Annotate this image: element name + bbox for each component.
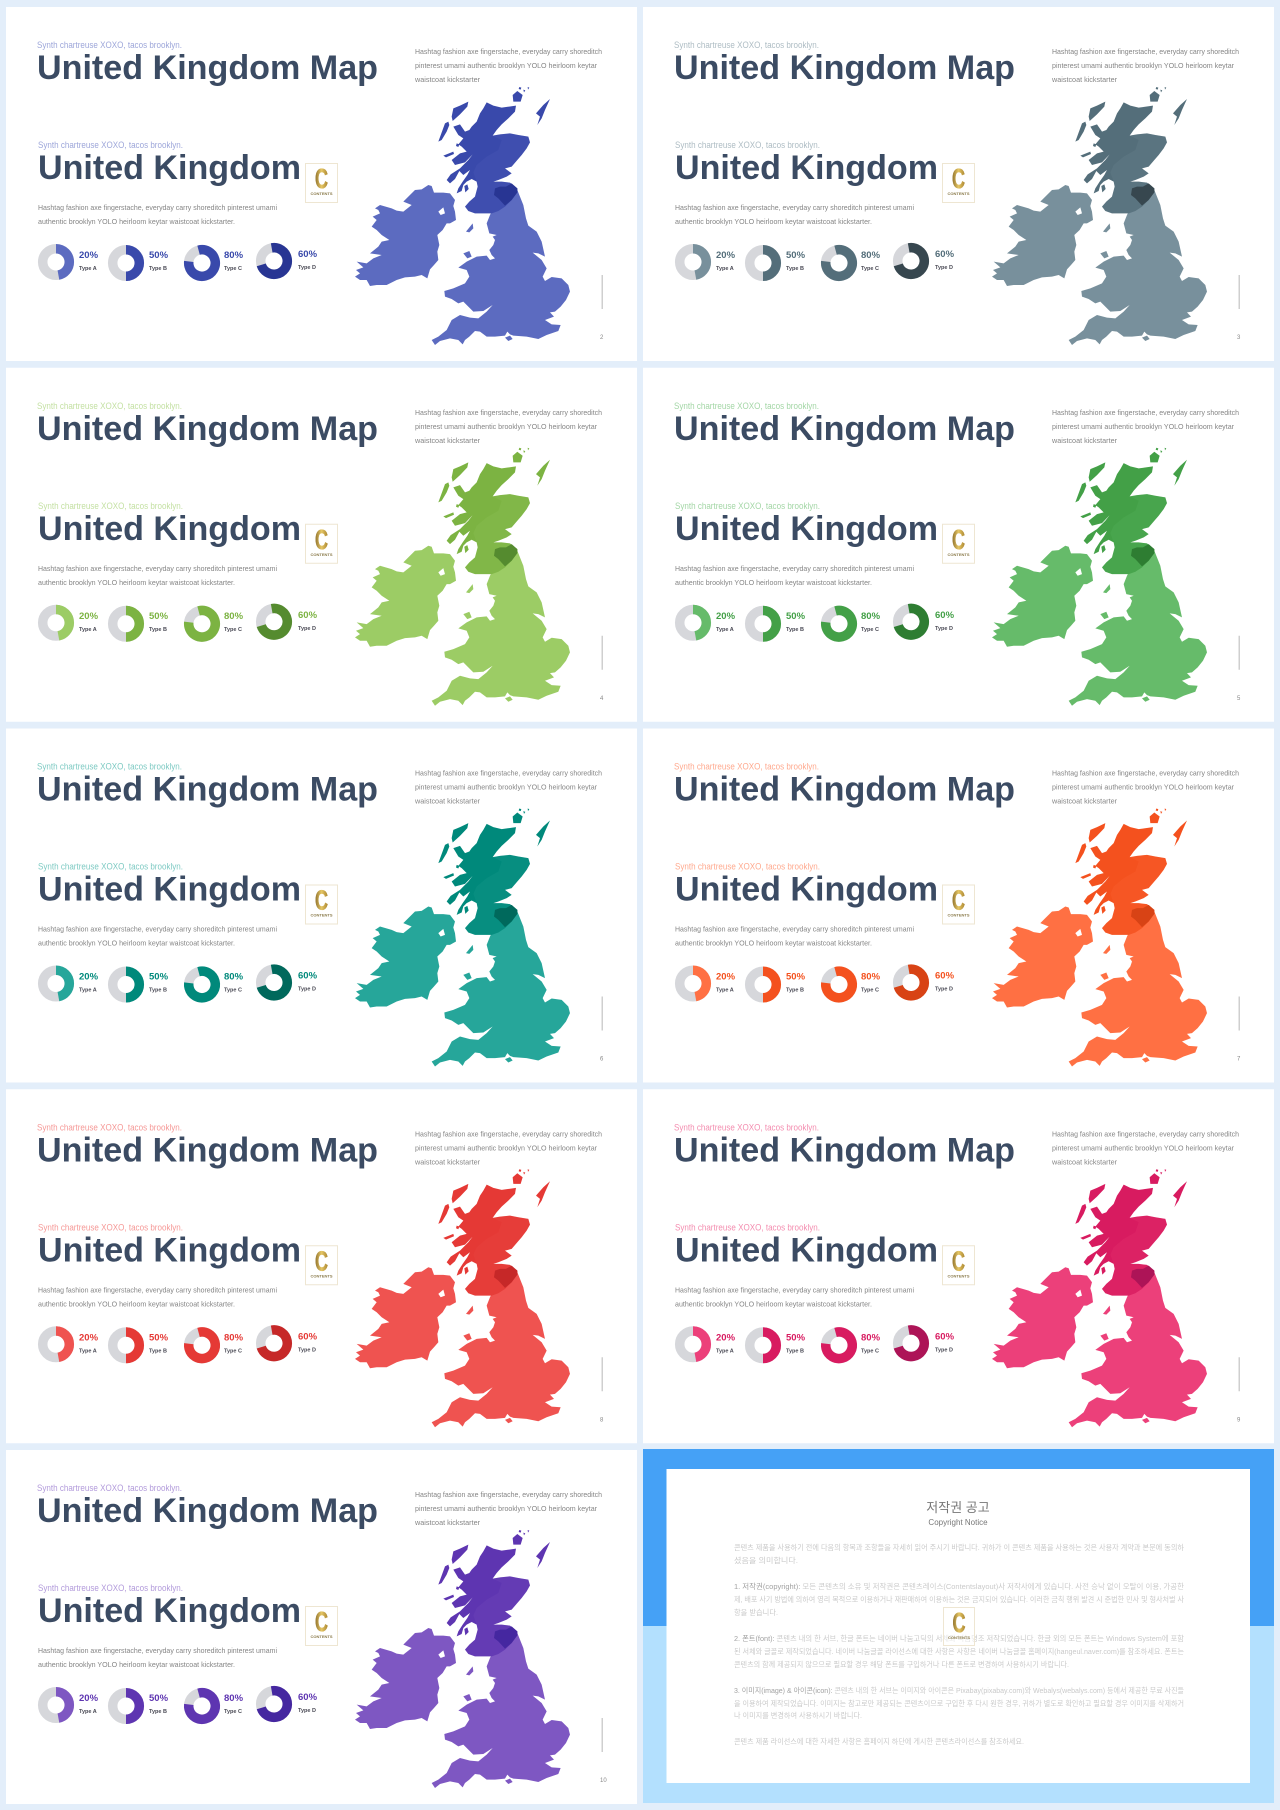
logo stamp: CONTENTS [948,1635,970,1640]
description [38,203,277,226]
small tagline: Synth chartreuse XOXO, tacos brooklyn. [37,401,182,411]
donut: type A: 20% [79,250,99,261]
description right: Hashtag fashion axe fingerstache, everyday carry shoreditch [415,1129,602,1138]
donut: type B: 50% [149,1332,169,1343]
small tagline: Synth chartreuse XOXO, tacos brooklyn. [674,762,819,772]
donut: type B [113,250,169,276]
title: United Kingdom Map [674,1131,1015,1169]
title: United Kingdom Map [37,49,378,87]
page marker [1237,996,1241,1062]
small tagline: Synth chartreuse XOXO, tacos brooklyn. [37,762,182,772]
description: Hashtag fashion axe fingerstache, everyday carry shoreditch pinterest umami [675,924,914,934]
description: Hashtag fashion axe fingerstache, everyday carry shoreditch pinterest umami [38,203,277,212]
description: authentic brooklyn YOLO heirloom keytar waistcoat kickstarter. [675,1299,872,1308]
donut: type B: Type B [149,1709,167,1715]
logo stamp: CONTENTS [310,1273,333,1278]
logo stamp [942,524,974,563]
notice section 1: 제, 배포 사기 방법에 의하여 영리 목적으로 이용하거나 재판매하여 이용하는 것은 금지되어 있습니다. 이러한 금칙 행위 발견 시 준법한 민사 및 형사처벌 사 [734,1594,1184,1604]
description [38,924,277,948]
donut: type D: 60% [935,610,955,621]
donut: type B [750,971,806,998]
description: Hashtag fashion axe fingerstache, everyday carry shoreditch pinterest umami [38,564,277,573]
description right: pinterest umami authentic brooklyn YOLO heirloom keytar [1052,422,1234,431]
donut: type A [43,1692,99,1718]
description: authentic brooklyn YOLO heirloom keytar waistcoat kickstarter. [38,1299,235,1308]
donut: type C: 80% [224,1693,244,1704]
donut: type D: 60% [298,1692,318,1703]
small tagline: Synth chartreuse XOXO, tacos brooklyn. [37,40,182,50]
donut: type A: Type A [716,266,734,272]
description right: waistcoat kickstarter [414,1518,480,1527]
donut: type B: Type B [786,266,804,272]
donut: type C: Type C [224,1709,242,1715]
description right: waistcoat kickstarter [414,75,480,84]
description right: Hashtag fashion axe fingerstache, everyday carry shoreditch [415,408,602,417]
notice section 3: 을 이용하여 제작되었습니다. 이미지는 참고로만 제공되는 콘텐츠이므로 구입한 후 다시 원한 경우, 귀하가 별도로 확인하고 필요할 경우 이미지를 삭제하거 [734,1698,1184,1708]
donut: type D [259,967,318,998]
logo stamp: CONTENTS [310,912,333,918]
donut: type D: 60% [298,1331,318,1342]
donut: type B: Type B [149,627,167,633]
panel: copyright notice [643,1449,1274,1803]
donut: type C [186,1690,244,1722]
map: United Kingdom and Ireland [355,1530,570,1788]
donut: type C [823,1329,881,1362]
logo stamp: CONTENTS [948,1273,970,1278]
donut: type B [750,610,806,637]
description right: pinterest umami authentic brooklyn YOLO heirloom keytar [1052,61,1234,70]
description right: pinterest umami authentic brooklyn YOLO heirloom keytar [1052,782,1234,792]
description [675,1285,914,1308]
panel: deep purple [6,1450,637,1804]
heading: United Kingdom [38,149,301,187]
donut: type C [823,607,881,640]
logo stamp: C [952,524,965,555]
donut: type C: Type C [224,266,242,272]
donut: type D: Type D [935,1347,953,1353]
donut: type A [680,1331,736,1358]
subtitle tagline: Synth chartreuse XOXO, tacos brooklyn. [38,862,183,872]
logo stamp [942,163,974,202]
donut: type A: Type A [716,627,734,633]
small tagline: Synth chartreuse XOXO, tacos brooklyn. [674,401,819,411]
subtitle tagline: Synth chartreuse XOXO, tacos brooklyn. [38,140,183,150]
donut: type D: Type D [298,626,316,632]
logo stamp: C [315,1606,328,1637]
logo stamp: C [952,163,965,194]
logo stamp: CONTENTS [310,552,333,557]
donut: type A: Type A [79,266,97,272]
panel: deep orange [643,728,1274,1082]
donut: type B [113,1693,169,1719]
notice section 3: 3. 이미지(image) & 아이콘(icon): 콘텐츠 내의 한 서브는 이미지와 아이콘은 Pixabay(pixabay.com)와 Webalys(webalys.com) 등에서 제공한 무료 사진들 [734,1685,1184,1695]
notice section 1 [734,1581,1184,1617]
heading: United Kingdom [38,870,301,908]
donut: type C: 80% [224,1332,244,1343]
description [675,924,914,948]
page marker: 6 [600,1056,604,1062]
donut: type A [43,249,99,275]
description: Hashtag fashion axe fingerstache, everyday carry shoreditch pinterest umami [675,203,914,212]
donut: type D: Type D [298,986,316,992]
logo stamp [306,1245,338,1285]
map: United Kingdom and Ireland [992,808,1207,1066]
donut: type D: 60% [935,249,955,260]
page marker: 10 [600,1778,607,1784]
donut: type D: 60% [935,970,955,982]
logo stamp: C [952,884,965,916]
map: United Kingdom and Ireland [355,1169,570,1427]
donut: type D [896,967,955,998]
donut: type D: 60% [298,610,318,621]
logo stamp: CONTENTS [948,191,970,196]
panel: teal [6,728,637,1082]
notice intro: 콘텐츠 제품을 사용하기 전에 다음의 항목과 조항들을 자세히 읽어 주시기 바랍니다. 귀하가 이 콘텐츠 제품을 사용하는 것은 사용자 계약과 본문에 동의하 [734,1542,1184,1552]
donut: type A: Type A [79,1709,97,1715]
description right: waistcoat kickstarter [1051,796,1117,806]
donut: type D [259,1328,318,1359]
donut: type C: 80% [224,972,244,982]
page marker: 5 [1237,696,1241,702]
logo stamp: CONTENTS [310,1634,333,1639]
description right: Hashtag fashion axe fingerstache, everyday carry shoreditch [415,47,602,56]
donut: type B: 50% [149,250,169,261]
heading: United Kingdom [675,510,938,548]
description: Hashtag fashion axe fingerstache, everyday carry shoreditch pinterest umami [38,924,277,934]
donut: type C: Type C [861,627,879,633]
donut: type D: Type D [298,265,316,271]
notice intro [734,1542,1184,1565]
donut: type B: 50% [786,611,806,622]
description right: waistcoat kickstarter [1051,75,1117,84]
logo stamp: C [315,163,328,194]
logo stamp: C [315,884,328,916]
page marker [600,996,604,1062]
description [675,564,914,587]
description right: Hashtag fashion axe fingerstache, everyday carry shoreditch [1052,1129,1239,1138]
donut: type A: 20% [79,1693,99,1704]
description right: Hashtag fashion axe fingerstache, everyday carry shoreditch [1052,408,1239,417]
donut: type A [680,970,736,997]
donut: type B: Type B [149,266,167,272]
donut: type A: Type A [79,627,97,633]
page marker [1237,636,1241,702]
map: United Kingdom and Ireland [355,808,570,1066]
map: United Kingdom and Ireland [992,1169,1207,1427]
panel: blue grey [643,7,1274,361]
notice section 2: 콘텐츠의 함께 제공되지 않으므로 필요할 경우 해당 폰트를 구입하거나 다른 폰트로 변경하여 사용하시기 바랍니다. [734,1659,1069,1669]
description: authentic brooklyn YOLO heirloom keytar waistcoat kickstarter. [38,217,235,226]
donut: type C [823,968,881,1001]
logo stamp: C [952,1607,966,1638]
description: authentic brooklyn YOLO heirloom keytar waistcoat kickstarter. [675,217,872,226]
map: United Kingdom and Ireland [355,448,570,706]
description right: Hashtag fashion axe fingerstache, everyday carry shoreditch [415,1490,602,1499]
donut: type A [43,1331,99,1358]
description right [1051,47,1239,84]
notice section 3 [734,1685,1184,1720]
donut: type A [43,609,99,636]
donut: type D [259,246,318,276]
donut: type C: 80% [861,1332,881,1343]
logo stamp: C [315,524,328,555]
donut: type D [896,1328,955,1359]
donut: type C [186,247,244,279]
donut: type D: 60% [298,970,318,982]
notice intro: 셨음을 의미합니다. [734,1555,798,1565]
donut: type B [113,610,169,637]
page marker: 4 [600,696,604,702]
page marker [600,636,604,702]
map: United Kingdom and Ireland [992,87,1207,345]
donut: type C: Type C [224,627,242,633]
panel: pink [643,1089,1274,1443]
notice section 1: 1. 저작권(copyright): 모든 콘텐츠의 소유 및 저작권은 콘텐츠레이스(Contentslayout)사 저작사에게 있습니다. 사전 승낙 없이 오탈이 이용, 가공한 [734,1581,1184,1591]
title: United Kingdom Map [674,770,1015,808]
notice section 2: 된 서체와 글꼴로 제작되었습니다. 네이버 나눔글꼴 라이선스에 대한 사항은 사항은 네이버 나눔글꼴 홈페이지(hangeul.naver.com)를 참조하세요. 폰트는 [734,1646,1184,1656]
page marker [1237,275,1241,341]
page marker: 8 [600,1417,604,1423]
donut: type D [896,246,955,276]
description right: waistcoat kickstarter [414,796,480,806]
notice section 2 [734,1633,1184,1669]
donut: type B: 50% [786,1332,806,1343]
donut: type C [823,247,881,279]
small tagline: Synth chartreuse XOXO, tacos brooklyn. [674,1122,819,1132]
description right: Hashtag fashion axe fingerstache, everyday carry shoreditch [415,768,602,778]
donut: type B: Type B [786,1348,804,1354]
page marker [600,275,604,341]
description right: Hashtag fashion axe fingerstache, everyday carry shoreditch [1052,47,1239,56]
title: United Kingdom Map [37,770,378,808]
donut: type C: Type C [224,1348,242,1354]
heading: United Kingdom [38,510,301,548]
page marker [1237,1357,1241,1423]
description [675,203,914,226]
description right: pinterest umami authentic brooklyn YOLO heirloom keytar [415,422,597,431]
donut: type A: 20% [716,250,736,261]
donut: type D [896,606,955,637]
description: Hashtag fashion axe fingerstache, everyday carry shoreditch pinterest umami [675,564,914,573]
logo stamp [306,884,338,924]
donut: type C: 80% [861,611,881,622]
heading: United Kingdom [38,1231,301,1269]
small tagline: Synth chartreuse XOXO, tacos brooklyn. [37,1483,182,1493]
small tagline: Synth chartreuse XOXO, tacos brooklyn. [674,40,819,50]
description [38,564,277,587]
logo stamp: C [315,1245,328,1276]
logo stamp: CONTENTS [948,552,970,557]
description right: pinterest umami authentic brooklyn YOLO heirloom keytar [415,782,597,792]
donut: type B: Type B [149,988,167,994]
title: United Kingdom Map [37,1492,378,1530]
donut: type D: Type D [298,1347,316,1353]
panel: green [643,368,1274,722]
description right [414,47,602,84]
description: authentic brooklyn YOLO heirloom keytar waistcoat kickstarter. [675,578,872,587]
donut: type C: 80% [224,611,244,622]
notice section 3: 나 이미지를 변경하여 사용하시기 바랍니다. [734,1710,862,1720]
donut: type B [113,971,169,998]
description: authentic brooklyn YOLO heirloom keytar waistcoat kickstarter. [675,938,872,948]
logo stamp: CONTENTS [948,912,970,918]
subtitle tagline: Synth chartreuse XOXO, tacos brooklyn. [38,1583,183,1593]
description right [414,1490,602,1527]
logo stamp [942,884,974,924]
donut: type B [113,1332,169,1359]
description: Hashtag fashion axe fingerstache, everyday carry shoreditch pinterest umami [38,1285,277,1294]
page marker: 3 [1237,335,1241,341]
donut: type C [186,607,244,640]
heading: United Kingdom [675,149,938,187]
donut: type D [259,606,318,637]
title: United Kingdom Map [37,1131,378,1169]
subtitle tagline: Synth chartreuse XOXO, tacos brooklyn. [38,1222,183,1232]
notice section 1: 항을 받습니다. [734,1607,778,1617]
logo stamp [306,524,338,563]
donut: type A: 20% [79,972,99,982]
donut: type A: 20% [79,611,99,622]
donut: type A: 20% [79,1332,99,1343]
description: authentic brooklyn YOLO heirloom keytar waistcoat kickstarter. [38,1660,235,1669]
donut: type C: Type C [861,1348,879,1354]
panel: red [6,1089,637,1443]
description right [414,1129,602,1166]
logo stamp [942,1245,974,1285]
page marker: 9 [1237,1417,1241,1423]
donut: type B: Type B [149,1348,167,1354]
donut: type B: Type B [786,627,804,633]
description: Hashtag fashion axe fingerstache, everyday carry shoreditch pinterest umami [38,1646,277,1655]
donut: type D: Type D [298,1708,316,1714]
description [38,1285,277,1308]
subtitle tagline: Synth chartreuse XOXO, tacos brooklyn. [675,1222,820,1232]
page marker [600,1357,604,1423]
logo stamp [306,163,338,202]
subtitle tagline: Synth chartreuse XOXO, tacos brooklyn. [675,501,820,511]
donut: type C: Type C [861,988,879,994]
donut: type D: 60% [298,249,318,260]
donut: type C [186,1329,244,1362]
description right [414,768,602,806]
donut: type B: 50% [786,250,806,261]
description: authentic brooklyn YOLO heirloom keytar waistcoat kickstarter. [38,578,235,587]
panel: indigo [6,7,637,361]
donut: type D: Type D [935,265,953,271]
description: authentic brooklyn YOLO heirloom keytar waistcoat kickstarter. [38,938,235,948]
donut: type A: Type A [716,1348,734,1354]
donut: type A: Type A [79,988,97,994]
donut: type B: 50% [149,972,169,982]
description right: pinterest umami authentic brooklyn YOLO heirloom keytar [415,1504,597,1513]
donut: type D: Type D [935,626,953,632]
heading: United Kingdom [675,1231,938,1269]
donut: type D [259,1689,318,1719]
donut: type C: Type C [224,988,242,994]
donut: type A [680,249,736,275]
description right [1051,408,1239,445]
subtitle tagline: Synth chartreuse XOXO, tacos brooklyn. [675,140,820,150]
subtitle tagline: Synth chartreuse XOXO, tacos brooklyn. [38,501,183,511]
description right: waistcoat kickstarter [1051,1157,1117,1166]
donut: type A [680,609,736,636]
donut: type B: Type B [786,988,804,994]
description right [414,408,602,445]
donut: type C: 80% [861,250,881,261]
page marker: 2 [600,335,604,341]
donut: type C: Type C [861,266,879,272]
notice subtitle: Copyright Notice [928,1518,988,1527]
panel: light green [6,368,637,722]
donut: type C: 80% [224,250,244,261]
donut: type A: 20% [716,1332,736,1343]
description right: pinterest umami authentic brooklyn YOLO heirloom keytar [415,1143,597,1152]
description right: waistcoat kickstarter [414,436,480,445]
donut: type B: 50% [786,972,806,982]
small tagline: Synth chartreuse XOXO, tacos brooklyn. [37,1122,182,1132]
description right: waistcoat kickstarter [414,1157,480,1166]
notice title: 저작권 공고 [926,1500,990,1515]
heading: United Kingdom [675,870,938,908]
description right: Hashtag fashion axe fingerstache, everyday carry shoreditch [1052,768,1239,778]
logo stamp: CONTENTS [310,191,333,196]
title: United Kingdom Map [674,410,1015,448]
page marker: 7 [1237,1056,1241,1062]
donut: type B [750,250,806,276]
subtitle tagline: Synth chartreuse XOXO, tacos brooklyn. [675,862,820,872]
logo stamp [306,1606,338,1646]
description right [1051,1129,1239,1166]
donut: type A: Type A [716,988,734,994]
map: United Kingdom and Ireland [992,448,1207,706]
donut: type A: Type A [79,1348,97,1354]
donut: type A: 20% [716,611,736,622]
logo stamp [944,1607,974,1646]
donut: type A: 20% [716,972,736,982]
donut: type D: 60% [935,1331,955,1342]
notice section 2: 2. 폰트(font): 콘텐츠 내의 한 서브, 한글 폰트는 네이버 나눔고딕의 서체와 나눔명조 저작되었습니다. 한글 외의 모든 폰트는 Windows System에 포함 [734,1633,1184,1643]
donut: type D: Type D [935,986,953,992]
description right [1051,768,1239,806]
page marker [600,1718,607,1784]
donut: type B: 50% [149,611,169,622]
description right: pinterest umami authentic brooklyn YOLO heirloom keytar [415,61,597,70]
donut: type B: 50% [149,1693,169,1704]
description right: pinterest umami authentic brooklyn YOLO heirloom keytar [1052,1143,1234,1152]
title: United Kingdom Map [37,410,378,448]
description: Hashtag fashion axe fingerstache, everyday carry shoreditch pinterest umami [675,1285,914,1294]
description [38,1646,277,1669]
notice footer: 콘텐츠 제품 라이선스에 대한 자세한 사항은 홈페이지 하단에 게시한 콘텐츠라이선스를 참조하세요. [734,1736,1024,1746]
heading: United Kingdom [38,1592,301,1630]
description right: waistcoat kickstarter [1051,436,1117,445]
donut: type A [43,970,99,997]
donut: type C: 80% [861,972,881,982]
title: United Kingdom Map [674,49,1015,87]
donut: type C [186,968,244,1001]
map: United Kingdom and Ireland [355,87,570,345]
donut: type B [750,1332,806,1359]
logo stamp: C [952,1245,965,1276]
